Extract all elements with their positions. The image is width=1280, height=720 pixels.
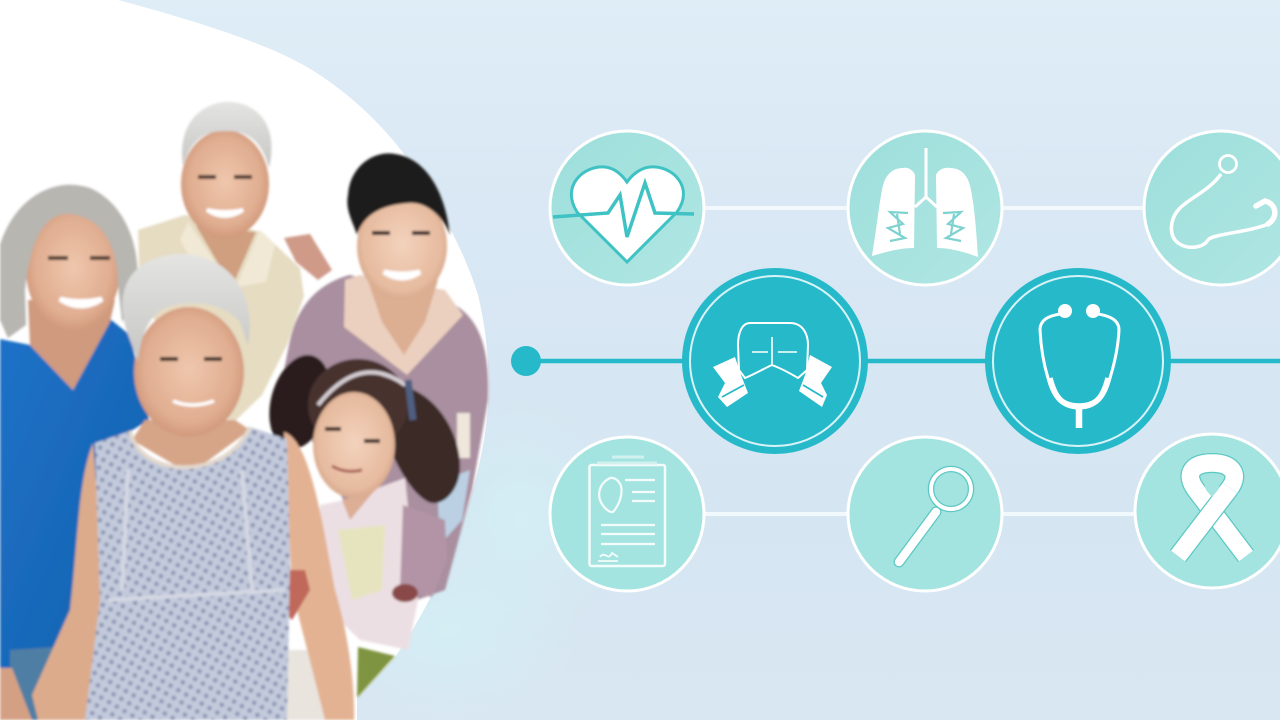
girl [260, 348, 470, 698]
icon: pelvis outline with ribbons [682, 268, 868, 454]
connector: white top row [700, 206, 1150, 210]
woman in front [32, 254, 354, 720]
icon: awareness ribbon [1135, 434, 1280, 588]
icon: magnifying glass [848, 437, 1002, 591]
icon: tube with ring [1144, 131, 1280, 285]
start dot [511, 346, 541, 376]
icon: heart with pulse [550, 131, 704, 285]
young woman [283, 153, 488, 606]
man at back [138, 102, 332, 424]
icon: stethoscope [985, 268, 1171, 454]
connector: teal centre line [526, 359, 1280, 363]
icon: lungs [848, 131, 1002, 285]
photo: family group [0, 102, 488, 720]
icon: clipboard report [550, 437, 704, 591]
woman in blue [0, 185, 149, 720]
white photo shape [0, 0, 489, 720]
connector: white bottom row [700, 512, 1140, 516]
